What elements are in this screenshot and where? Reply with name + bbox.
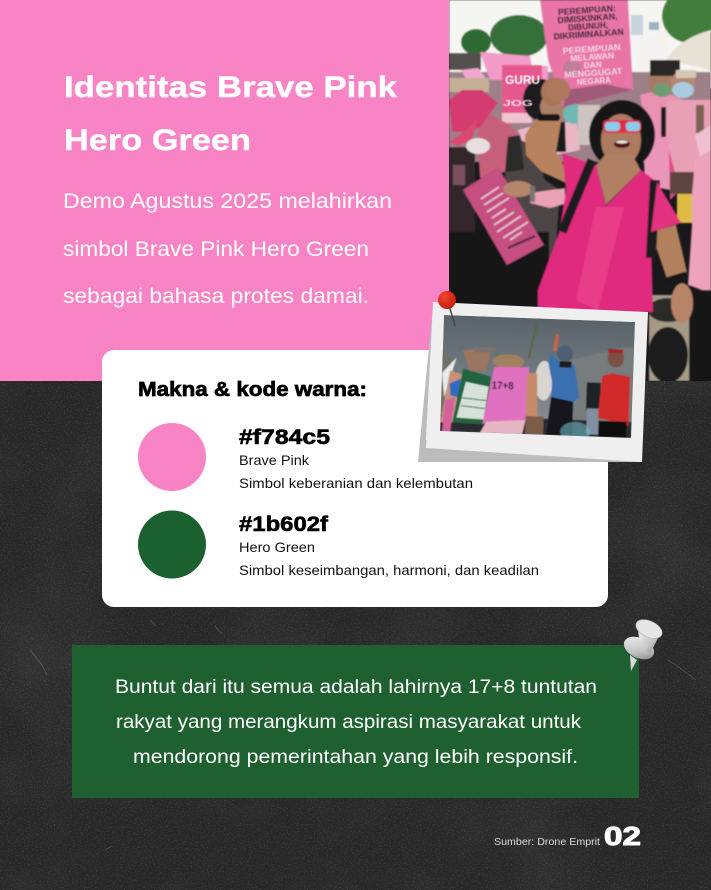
swatch: hero green bbox=[138, 510, 206, 578]
woman behind, black cap bbox=[522, 78, 547, 120]
title bbox=[64, 71, 397, 157]
protest photo: GURU bbox=[505, 73, 540, 87]
polaroid photo: 17+8 bbox=[491, 380, 514, 393]
protest photo: JOG bbox=[503, 99, 533, 108]
green callout bbox=[72, 645, 639, 798]
sky and trees bbox=[449, 0, 711, 75]
crowd backdrop bbox=[449, 72, 711, 162]
placard text: PEREMPUAN: bbox=[558, 4, 616, 17]
main woman pink top bbox=[538, 153, 681, 312]
placard text bbox=[553, 4, 624, 86]
pink flyer bbox=[482, 366, 529, 425]
placard text: MELAWAN bbox=[570, 51, 615, 63]
icon: silver thumbtack bbox=[620, 616, 665, 671]
title: Hero Green bbox=[64, 124, 251, 157]
left dark strip bbox=[449, 147, 475, 232]
top placard bbox=[540, 0, 633, 107]
hero green details: #1b602f bbox=[239, 513, 329, 536]
hero green details: Simbol keseimbangan, harmoni, dan keadilan bbox=[239, 562, 539, 578]
placard text: DIBUNUH, bbox=[568, 21, 608, 32]
brave pink details bbox=[239, 426, 473, 491]
intro text: Demo Agustus 2025 melahirkan bbox=[63, 190, 392, 213]
hero green details: Hero Green bbox=[239, 539, 315, 555]
main woman arm bbox=[525, 112, 566, 183]
brave pink details: Simbol keberanian dan kelembutan bbox=[239, 475, 473, 491]
placard held left bbox=[463, 167, 544, 265]
green flyer bbox=[452, 368, 491, 425]
main woman hair and face bbox=[589, 100, 655, 170]
green callout: rakyat yang merangkum aspirasi masyarakat untuk bbox=[116, 711, 581, 733]
pink header panel bbox=[0, 0, 449, 381]
left woman with pink hat bbox=[478, 108, 522, 178]
placard text: DAN bbox=[583, 60, 602, 70]
white colour card bbox=[102, 350, 608, 607]
green callout: Buntut dari itu semua adalah lahirnya 17+8 tuntutan bbox=[115, 676, 597, 698]
placard text: MENGGUGAT bbox=[564, 67, 623, 80]
brave pink details: #f784c5 bbox=[239, 426, 330, 449]
right arm and hand bbox=[655, 224, 688, 278]
left woman forearm bbox=[503, 181, 533, 197]
intro text: sebagai bahasa protes damai. bbox=[63, 285, 369, 308]
placard text: PEREMPUAN bbox=[562, 43, 621, 56]
page number: 02 bbox=[604, 821, 641, 851]
hero green details bbox=[239, 513, 539, 578]
placard text: NEGARA bbox=[577, 76, 611, 87]
right people bbox=[586, 382, 601, 411]
blue person bbox=[547, 354, 581, 402]
sunglasses bbox=[603, 120, 641, 133]
card heading: Makna & kode warna: bbox=[138, 379, 367, 401]
road bbox=[649, 295, 691, 381]
brave pink details: Brave Pink bbox=[239, 452, 310, 468]
intro text: simbol Brave Pink Hero Green bbox=[63, 238, 369, 261]
intro text bbox=[63, 190, 392, 308]
right pink person bbox=[688, 150, 711, 293]
placard text: DIMISKINKAN, bbox=[557, 12, 618, 25]
swatch: brave pink bbox=[138, 423, 206, 491]
placard text: DIKRIMINALKAN bbox=[553, 28, 624, 42]
icon: red push pin bbox=[438, 291, 456, 326]
green callout: mendorong pemerintahan yang lebih responsif. bbox=[133, 746, 578, 768]
source note: Sumber: Drone Emprit bbox=[494, 836, 600, 848]
protest photo bbox=[449, 0, 711, 383]
title: Identitas Brave Pink bbox=[64, 71, 397, 104]
polaroid photo bbox=[418, 302, 648, 462]
right men bbox=[639, 92, 684, 139]
